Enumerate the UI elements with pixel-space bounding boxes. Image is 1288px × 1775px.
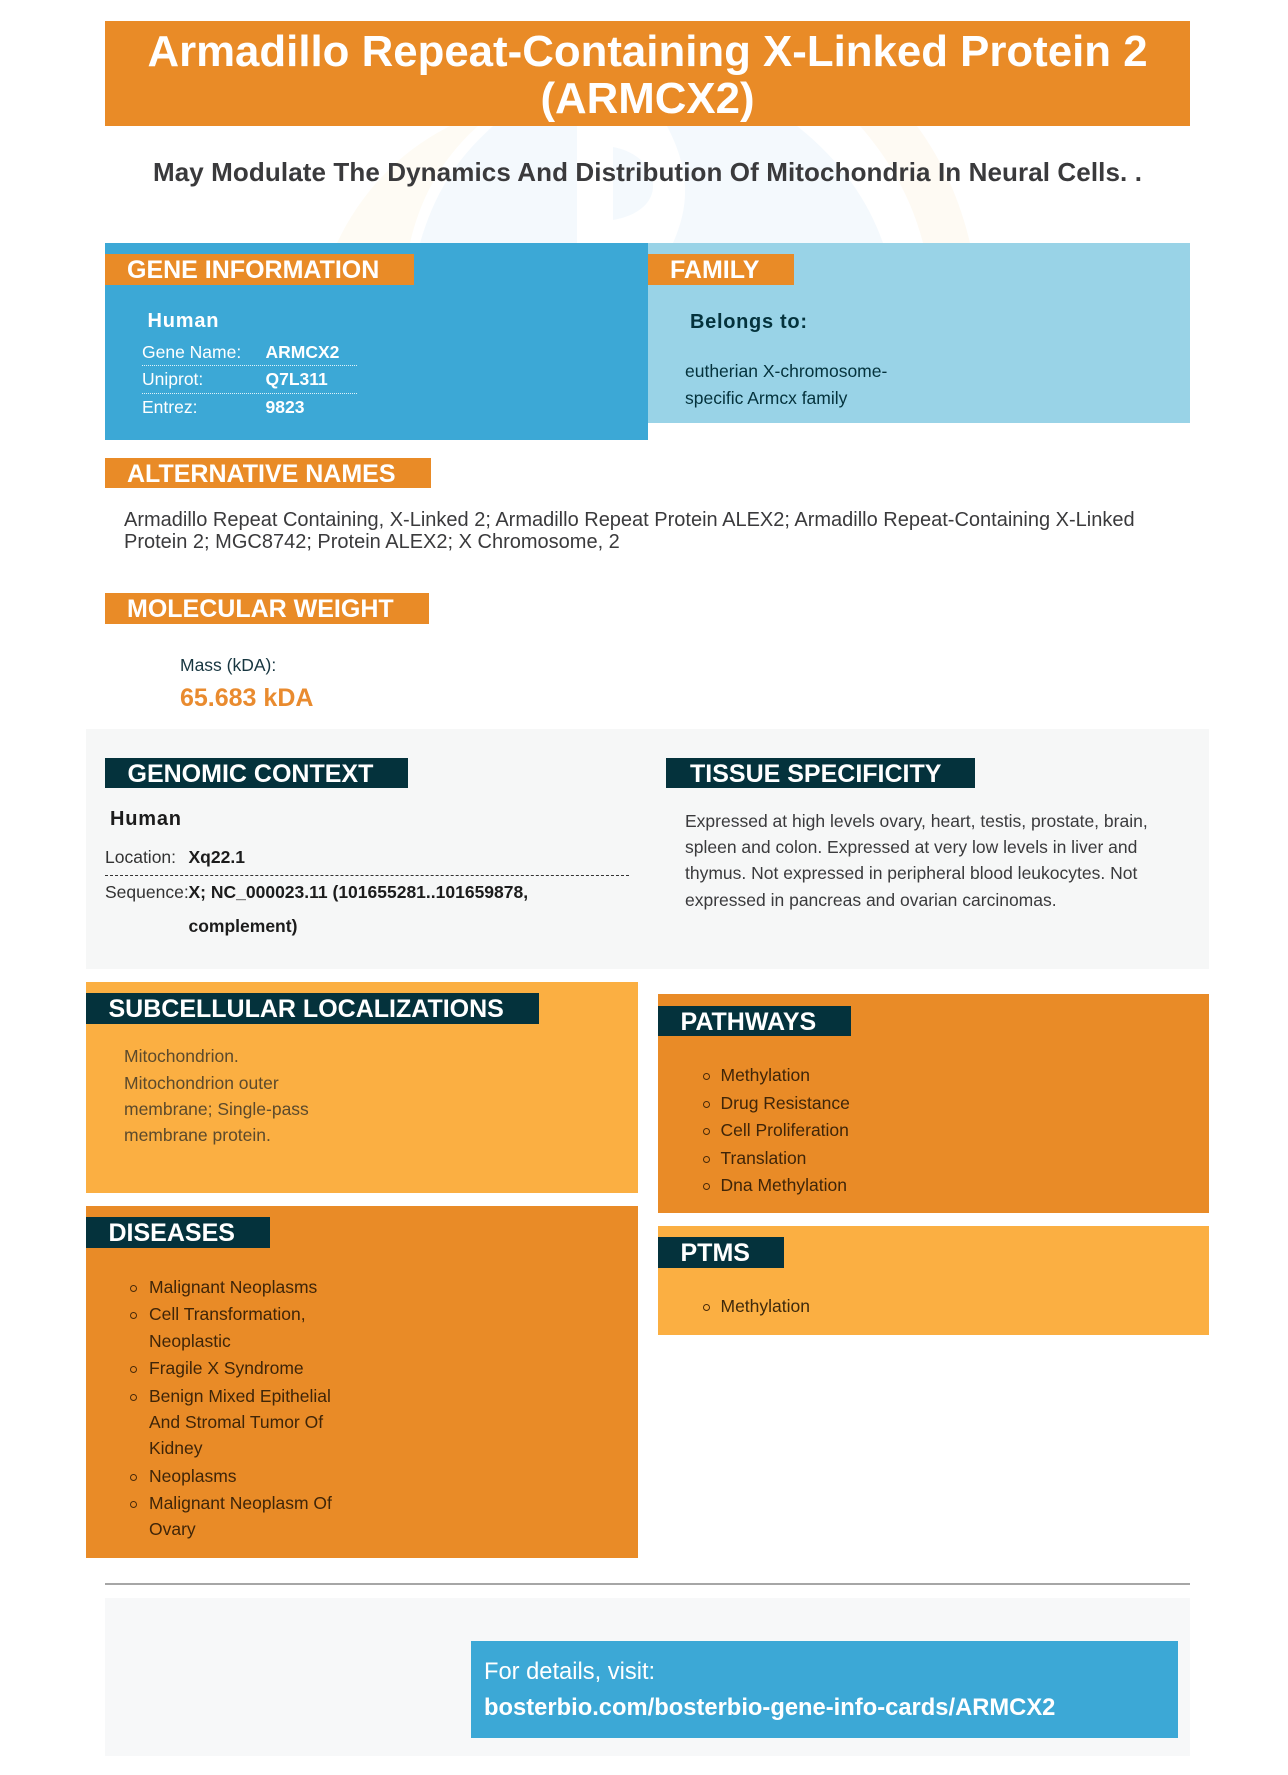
family description [685,361,887,408]
disease list: Ovary [149,1519,196,1539]
pathway list: Translation [720,1148,806,1168]
callout: details link: bosterbio.com/bosterbio-gene-info-cards/ARMCX2 [484,1694,1055,1721]
gene identifiers table: ARMCX2 [266,342,339,362]
panel: diseases [86,1206,638,1558]
species label: Human [148,310,219,332]
localization text: Mitochondrion outer [124,1073,279,1093]
genomic location and sequence: Location: [105,847,176,867]
panel: footer [105,1598,1190,1756]
title banner: (ARMCX2) [540,74,755,123]
title banner: Armadillo Repeat-Containing X-Linked Protein 2 [147,27,1148,76]
gene identifiers table: Entrez: [142,397,197,417]
disease list: Neoplasms [149,1466,237,1486]
alternative names text: Armadillo Repeat Containing, X-Linked 2; Armadillo Repeat Protein ALEX2; Armadillo Repeat-Containing X-Linked [124,509,1135,531]
gene identifiers table: Uniprot: [142,368,203,388]
heading: pathways [658,1006,851,1036]
localization text [124,1046,309,1145]
mass label: Mass (kDA): [180,655,276,675]
genomic location and sequence: complement) [188,916,297,936]
pathway list [703,1065,850,1195]
heading: ptms: PTMS [680,1239,750,1267]
heading: family: FAMILY [670,256,759,284]
pathway list: Methylation [720,1065,810,1085]
panel: ptms [658,1226,1209,1335]
localization text: membrane protein. [124,1125,271,1145]
disease list: Fragile X Syndrome [149,1358,304,1378]
heading: gene information: GENE INFORMATION [127,256,379,284]
panel: pathways [658,994,1209,1213]
heading: diseases: DISEASES [108,1219,235,1247]
ptm list: Methylation [720,1296,810,1316]
heading: subcellular localizations: SUBCELLULAR LOCALIZATIONS [108,995,504,1023]
heading: molecular weight: MOLECULAR WEIGHT [127,595,394,623]
heading: tissue specificity: TISSUE SPECIFICITY [690,760,941,788]
disease list [130,1277,332,1539]
heading: ptms [658,1237,784,1268]
alternative names text [124,509,1135,553]
tissue specificity text: thymus. Not expressed in peripheral blood leukocytes. Not [685,863,1137,883]
localization text: membrane; Single-pass [124,1099,309,1119]
footer divider [105,1583,1190,1585]
background watermark logo [337,126,970,243]
disease list: Benign Mixed Epithelial [149,1386,331,1406]
panel: genomic context and tissue specificity [86,729,1209,969]
disease list: Cell Transformation, [149,1304,306,1324]
genomic location and sequence: X; NC_000023.11 (101655281..101659878, [188,882,528,902]
gene identifiers table [142,342,357,417]
panel: family [648,243,1190,423]
title banner [105,21,1190,126]
tissue specificity text: spleen and colon. Expressed at very low levels in liver and [685,837,1137,857]
gene identifiers table: 9823 [266,397,304,417]
heading: family [648,254,794,285]
gene identifiers table: Gene Name: [142,342,241,362]
pathway list: Dna Methylation [720,1175,847,1195]
genomic location and sequence [105,847,629,936]
heading: pathways: PATHWAYS [680,1008,816,1036]
subtitle: May Modulate The Dynamics And Distribution Of Mitochondria In Neural Cells. . [153,157,1142,187]
callout: details link: For details, visit: [484,1659,655,1685]
pathway list: Cell Proliferation [720,1120,849,1140]
alternative names text: Protein 2; MGC8742; Protein ALEX2; X Chromosome, 2 [124,531,620,553]
disease list: Malignant Neoplasm Of [149,1493,332,1513]
tissue specificity text [685,811,1148,910]
disease list: Malignant Neoplasms [149,1277,317,1297]
callout: details link [471,1641,1178,1738]
pathway list: Drug Resistance [720,1093,850,1113]
tissue specificity text: expressed in pancreas and ovarian carcinomas. [685,890,1057,910]
mass value: 65.683 kDA [180,684,313,712]
disease list: And Stromal Tumor Of [149,1412,323,1432]
heading: diseases [86,1217,270,1248]
heading: alternative names: ALTERNATIVE NAMES [127,460,396,488]
genomic location and sequence: Xq22.1 [188,847,245,867]
genomic species label: Human [110,808,182,830]
disease list: Neoplastic [149,1331,231,1351]
disease list: Kidney [149,1438,203,1458]
gene identifiers table: Q7L311 [266,368,328,388]
genomic location and sequence: Sequence: [105,882,189,902]
heading: genomic context: GENOMIC CONTEXT [128,760,373,788]
family description: specific Armcx family [685,388,847,408]
localization text: Mitochondrion. [124,1046,239,1066]
panel: gene information [105,243,648,440]
belongs to label: Belongs to: [690,311,808,333]
tissue specificity text: Expressed at high levels ovary, heart, testis, prostate, brain, [685,811,1148,831]
panel: subcellular localizations [86,982,638,1193]
family description: eutherian X-chromosome- [685,361,887,381]
